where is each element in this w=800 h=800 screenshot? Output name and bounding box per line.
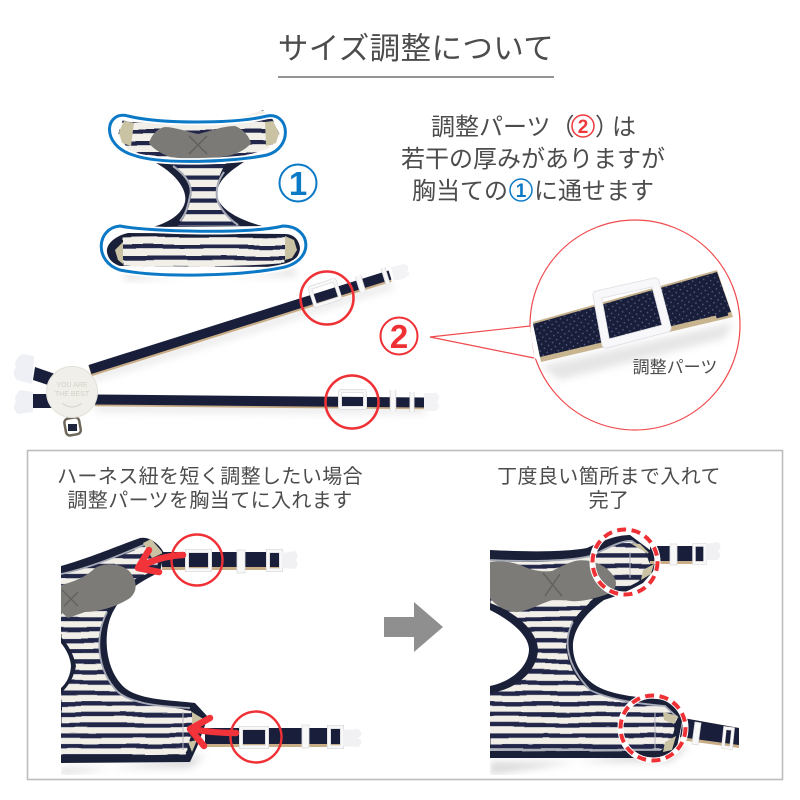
red circle: before bottom: [230, 712, 282, 762]
strap assembly photo: [14, 264, 439, 436]
explanation text: 若干の厚みがありますが: [401, 146, 665, 173]
badge: number 2: [380, 318, 418, 355]
explanation text: は: [612, 114, 636, 141]
strap top: [650, 561, 704, 564]
dashed circle: after top: [592, 530, 658, 594]
callout label: 調整パーツ: [633, 358, 717, 377]
left photo: before: [61, 538, 362, 775]
arrow: top insertion: [138, 550, 183, 572]
red circle: upper adjuster: [300, 272, 354, 324]
explanation text: [401, 114, 665, 205]
right heading: [497, 465, 721, 512]
waist navy binding: [150, 160, 262, 227]
badge: number 1: 1: [289, 165, 307, 202]
badge: number 1: [280, 164, 316, 202]
left heading: ハーネス紐を短く調整したい場合: [57, 465, 363, 488]
left heading: 調整パーツを胸当てに入れます: [67, 489, 353, 512]
panel: how to adjust: [28, 450, 782, 780]
blue outline: upper band: [110, 115, 285, 161]
neck hole: [490, 603, 538, 693]
strap bottom: [680, 718, 739, 748]
harness photo with numbered zones: [101, 110, 306, 280]
right photo: after: [490, 535, 739, 775]
dashed circle: after bottom: [620, 696, 686, 760]
explanation text: 1: [516, 181, 527, 202]
round medal: THE BEST: [55, 391, 90, 398]
grey arrow between photos: [384, 602, 443, 652]
tan inner corners top: [119, 121, 279, 146]
bow: [490, 560, 616, 612]
red circle: before top: [172, 534, 222, 586]
blue outline: lower band: [101, 226, 306, 275]
badge: number 2: 2: [390, 318, 408, 355]
bow: [61, 564, 136, 618]
white adjuster slide: [597, 282, 667, 344]
magnified callout: adjuster part: [430, 220, 740, 430]
explanation text: 胸当ての: [412, 178, 508, 205]
upper strap: [90, 264, 410, 371]
red circle: lower adjuster: [326, 376, 378, 428]
explanation text: ）: [595, 114, 619, 141]
top band stripes: [235, 110, 270, 124]
lower strap: [95, 390, 439, 412]
explanation text: に通せます: [534, 178, 654, 205]
D ring: [64, 417, 81, 436]
harness body: [61, 538, 208, 763]
waist stripes: [171, 163, 240, 226]
title: サイズ調整について: [278, 32, 554, 66]
left heading: [57, 465, 363, 512]
bow top: [149, 126, 251, 160]
round medal: YOU ARE: [56, 382, 88, 389]
left straps and clips: [14, 354, 58, 414]
right heading: 完了: [589, 489, 629, 512]
round medal: [46, 366, 98, 418]
strap bottom: [206, 744, 340, 747]
strap top: [162, 567, 279, 570]
right heading: 丁度良い箇所まで入れて: [497, 465, 721, 488]
harness body: [490, 535, 683, 758]
explanation text: 調整パーツ（: [431, 114, 575, 141]
arrow: bottom insertion: [190, 718, 236, 746]
explanation text: 2: [578, 117, 588, 138]
bottom band: [107, 233, 300, 267]
